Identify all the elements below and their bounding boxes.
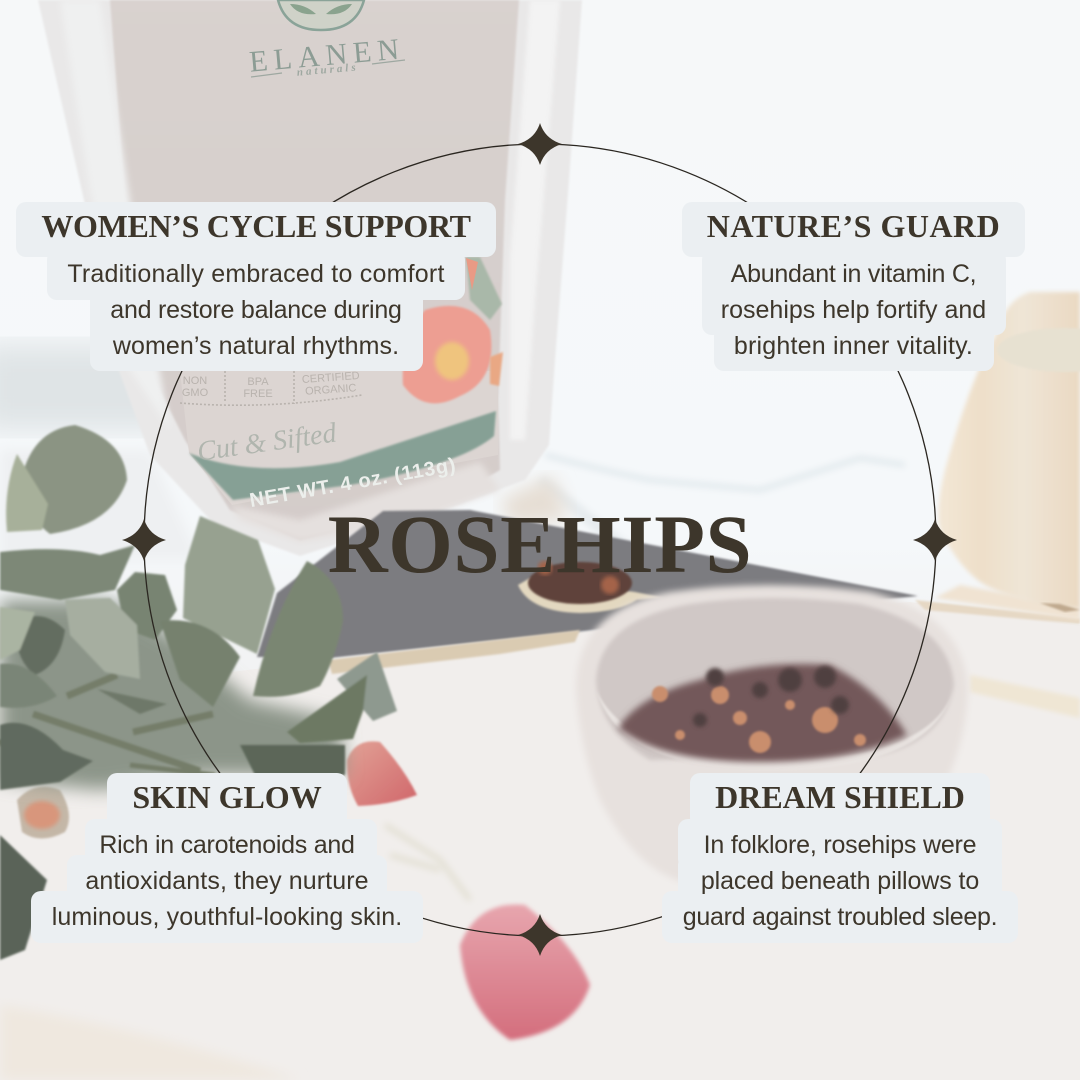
text block [52, 831, 402, 931]
pouch: naturals [296, 61, 359, 79]
text block: brighten inner vitality. [734, 332, 973, 360]
text block: women’s natural rhythms. [113, 332, 399, 360]
leaf cluster shadow [0, 600, 345, 790]
text block: luminous, youthful-looking skin. [52, 903, 402, 931]
pouch label details: FREE [243, 388, 273, 400]
panel: women's cycle support [16, 202, 496, 371]
pouch label details [182, 370, 360, 400]
heading: SKIN GLOW [132, 779, 322, 815]
heading: WOMEN’S CYCLE SUPPORT [41, 208, 471, 244]
sparkle: top [518, 123, 562, 165]
sparkle: left [122, 519, 166, 561]
panel: dream shield [662, 773, 997, 931]
text block: guard against troubled sleep. [683, 903, 997, 931]
pouch label details: GMO [182, 387, 209, 399]
pouch label details: ORGANIC [305, 382, 357, 398]
pouch: ELANEN [248, 32, 406, 79]
rose buds [17, 741, 590, 1040]
text block: Rich in carotenoids and [99, 831, 355, 859]
slate board [257, 510, 918, 658]
pouch green band [189, 411, 496, 500]
pouch: NET WT. 4 oz. (113g) [248, 454, 458, 512]
pouch [38, 0, 582, 556]
text block [67, 260, 445, 360]
text block: placed beneath pillows to [701, 867, 979, 895]
pouch: Cut & Sifted [195, 417, 339, 468]
ring [144, 144, 936, 936]
text block: In folklore, rosehips were [704, 831, 976, 859]
pouch logo [278, 0, 364, 30]
panel: nature's guard [682, 202, 1025, 371]
pouch label details: CERTIFIED [302, 370, 360, 386]
heading: DREAM SHIELD [715, 779, 965, 815]
text block: Abundant in vitamin C, [731, 260, 976, 288]
mug [938, 292, 1080, 612]
sparkle: right [913, 519, 957, 561]
text block [683, 831, 997, 931]
pouch rose print [466, 257, 502, 320]
counter bottom tone [0, 1005, 300, 1080]
wooden board edge [328, 630, 580, 674]
chopstick [970, 675, 1080, 718]
pouch label details: BPA [247, 376, 269, 388]
text block: and restore balance during [110, 296, 402, 324]
marble counter and veins [0, 450, 200, 560]
pouch label details: NON [183, 375, 207, 387]
spoon with rosehips [518, 561, 665, 613]
title: ROSEHIPS [328, 498, 752, 590]
text block [721, 260, 986, 360]
dried flowers on table [385, 825, 470, 900]
text block: antioxidants, they nurture [85, 867, 369, 895]
text block: Traditionally embraced to comfort [67, 260, 445, 288]
table surface [0, 602, 1080, 1080]
panel: skin glow [31, 773, 423, 936]
ceramic bowl with rosehips [576, 585, 968, 885]
leaves [0, 425, 397, 960]
heading: NATURE’S GUARD [707, 208, 1000, 244]
sparkle: bottom [518, 914, 562, 956]
text block: rosehips help fortify and [721, 296, 986, 324]
